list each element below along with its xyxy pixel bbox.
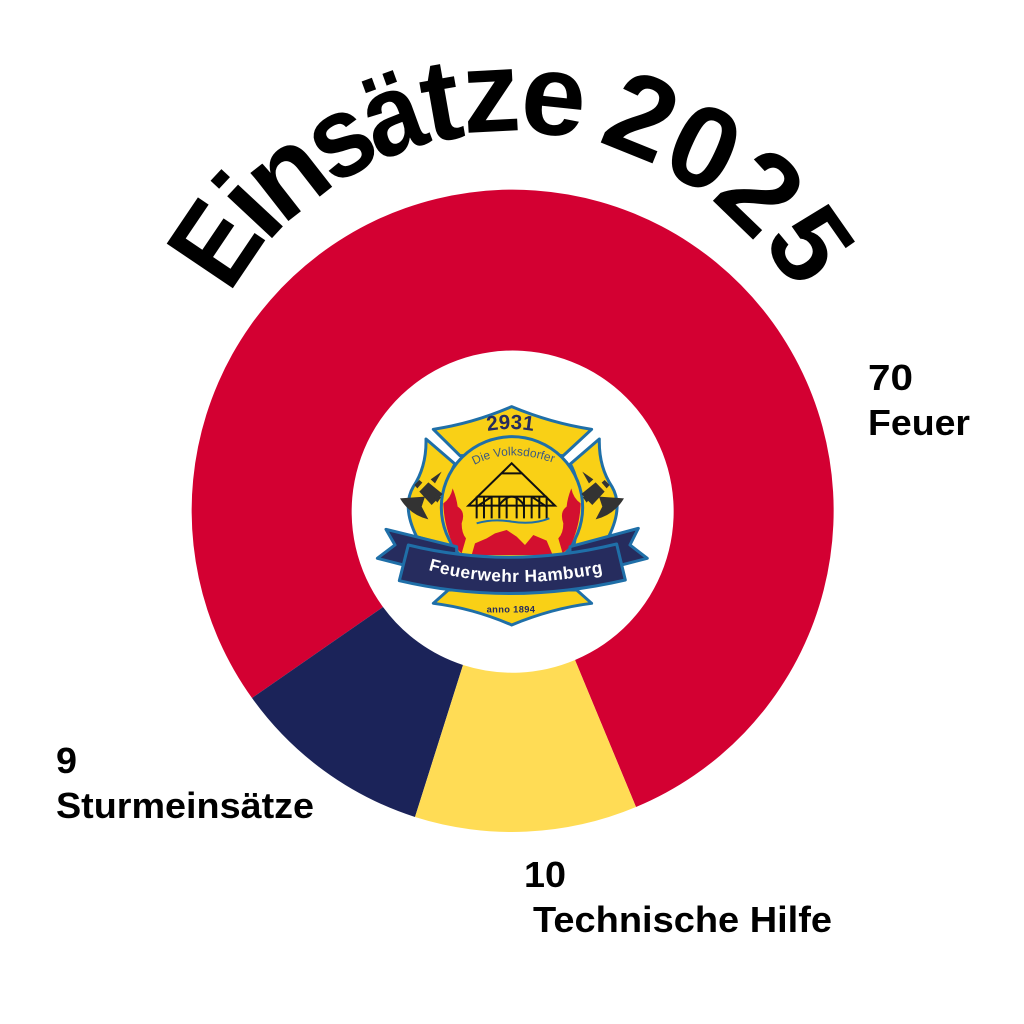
title: t <box>410 33 471 168</box>
title: E <box>143 179 289 308</box>
emblem central disc <box>441 437 583 578</box>
label: Technische Hilfe: 10 <box>524 854 566 895</box>
text Die Volksdorfer: Die Volksdorfer <box>472 446 556 464</box>
label: Feuer: 70 <box>868 357 913 398</box>
title: 5 <box>741 183 879 306</box>
title: 2 <box>588 44 696 188</box>
title <box>143 25 879 308</box>
emblem top arm <box>433 407 592 456</box>
flames <box>443 488 581 555</box>
ribbon main band <box>399 544 625 593</box>
emblem bottom arm <box>433 590 592 625</box>
label: Sturmeinsätze: Sturmeinsätze <box>56 785 314 826</box>
donut chart <box>192 190 834 832</box>
ribbon right tail <box>570 528 647 565</box>
title: e <box>515 27 593 163</box>
logo: Feuerwehr Hamburg emblem <box>376 405 649 626</box>
label: Sturmeinsätze: 9 <box>56 740 77 781</box>
title: 0 <box>647 75 761 220</box>
hall building <box>468 463 555 518</box>
wave under building <box>477 518 549 523</box>
title: s <box>280 65 397 208</box>
number 2931: 2931 <box>486 414 533 431</box>
ribbon text: Feuerwehr Hamburg <box>429 558 602 582</box>
emblem right arm <box>570 439 617 547</box>
label: Sturmeinsätze <box>56 740 314 826</box>
slice: Technische Hilfe 10 <box>415 660 636 832</box>
title: n <box>217 100 353 246</box>
icon: left axe <box>400 472 443 519</box>
text anno 1894: anno 1894 <box>487 605 536 615</box>
slice: Sturmeinsätze 9 <box>252 607 463 817</box>
title: 2 <box>693 122 829 261</box>
label: Feuer <box>868 357 970 443</box>
title: z <box>459 25 523 158</box>
label: Technische Hilfe <box>524 854 832 940</box>
icon: right axe <box>581 472 624 519</box>
label: Technische Hilfe: Technische Hilfe <box>533 899 832 940</box>
emblem left arm <box>408 439 455 547</box>
title: ä <box>342 43 442 185</box>
slice: Feuer 70 <box>192 190 834 807</box>
label: Feuer: Feuer <box>868 402 970 443</box>
ribbon left tail <box>377 529 457 565</box>
title: i <box>190 149 307 261</box>
